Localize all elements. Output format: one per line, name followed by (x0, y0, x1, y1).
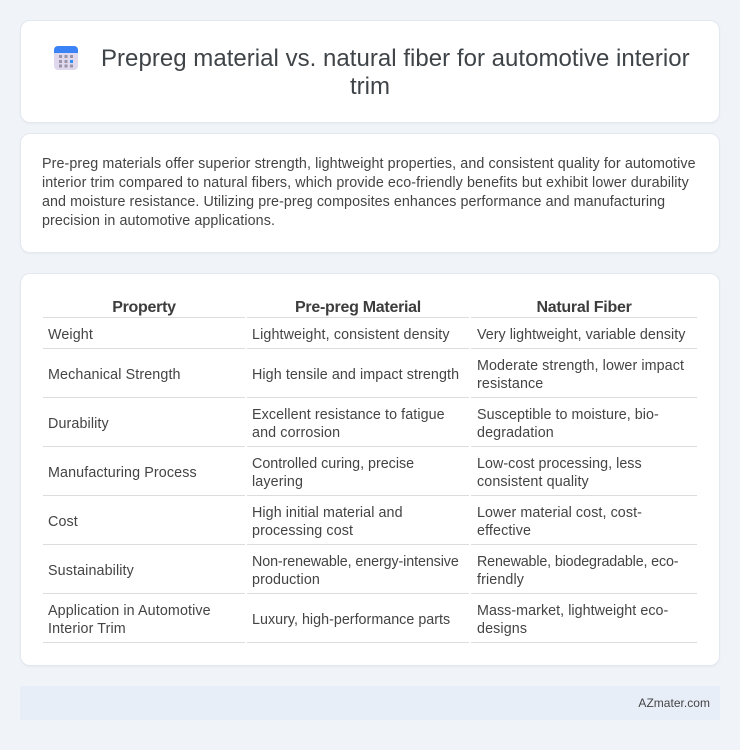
row: weight: Weight (48, 327, 93, 343)
summary text (42, 156, 696, 229)
row: durability: Durability (48, 416, 109, 432)
row: cost: High initial material and (252, 505, 403, 521)
footer bar (20, 686, 720, 720)
row: manufacturing process: layering (252, 474, 303, 490)
row: application in automotive interior trim: Luxury, high-performance parts (252, 612, 450, 628)
row: durability: Excellent resistance to fatigue (252, 407, 445, 423)
row: mechanical strength: High tensile and impact strength (252, 367, 459, 383)
title (101, 45, 690, 100)
row: weight: Very lightweight, variable density (477, 327, 685, 343)
row: sustainability: Sustainability (48, 563, 134, 579)
row: application in automotive interior trim: Application in Automotive (48, 603, 211, 619)
row: durability: degradation (477, 425, 554, 441)
row: weight: Lightweight, consistent density (252, 327, 450, 343)
panel: title card (20, 20, 720, 123)
row: application in automotive interior trim: Mass-market, lightweight eco- (477, 603, 668, 619)
row: cost (48, 505, 642, 539)
row: cost: effective (477, 523, 531, 539)
title: Prepreg material vs. natural fiber for automotive interior (101, 45, 690, 72)
table header: property: Property (112, 299, 176, 316)
row: durability (48, 407, 659, 441)
table header: pre-preg material: Pre-preg Material (295, 299, 421, 316)
row: mechanical strength: resistance (477, 376, 543, 392)
table header: natural fiber: Natural Fiber (536, 299, 632, 316)
row: mechanical strength: Moderate strength, lower impact (477, 358, 684, 374)
summary text: Pre-preg materials offer superior strength, lightweight properties, and consistent quality for automotive (42, 156, 696, 172)
summary text: interior trim compared to natural fibers, which provide eco-friendly benefits but exhibit lower durability (42, 175, 689, 191)
row: sustainability (48, 554, 678, 588)
row: manufacturing process: Manufacturing Process (48, 465, 197, 481)
row: cost: Lower material cost, cost- (477, 505, 642, 521)
row: durability: and corrosion (252, 425, 340, 441)
summary text: precision in automotive applications. (42, 213, 275, 229)
row: durability: Susceptible to moisture, bio- (477, 407, 659, 423)
row: sustainability: Non-renewable, energy-intensive (252, 554, 459, 570)
row: sustainability: friendly (477, 572, 524, 588)
row: manufacturing process: consistent quality (477, 474, 589, 490)
footer text: AZmater.com (638, 696, 710, 710)
title: trim (350, 73, 390, 100)
row: application in automotive interior trim: Interior Trim (48, 621, 126, 637)
row: weight (48, 327, 686, 343)
row: sustainability: Renewable, biodegradable, eco- (477, 554, 678, 570)
row: mechanical strength: Mechanical Strength (48, 367, 181, 383)
row: cost: processing cost (252, 523, 353, 539)
panel: summary (20, 133, 720, 253)
row: manufacturing process: Low-cost processing, less (477, 456, 642, 472)
icon: calendar (54, 46, 78, 70)
panel: comparison table (20, 273, 720, 666)
row: manufacturing process (48, 456, 642, 490)
row: manufacturing process: Controlled curing, precise (252, 456, 414, 472)
row: application in automotive interior trim (48, 603, 668, 637)
summary text: and moisture resistance. Utilizing pre-preg composites enhances performance and manufacturing (42, 194, 665, 210)
row: cost: Cost (48, 514, 78, 530)
row: mechanical strength (48, 358, 684, 392)
row: application in automotive interior trim: designs (477, 621, 527, 637)
row: sustainability: production (252, 572, 320, 588)
